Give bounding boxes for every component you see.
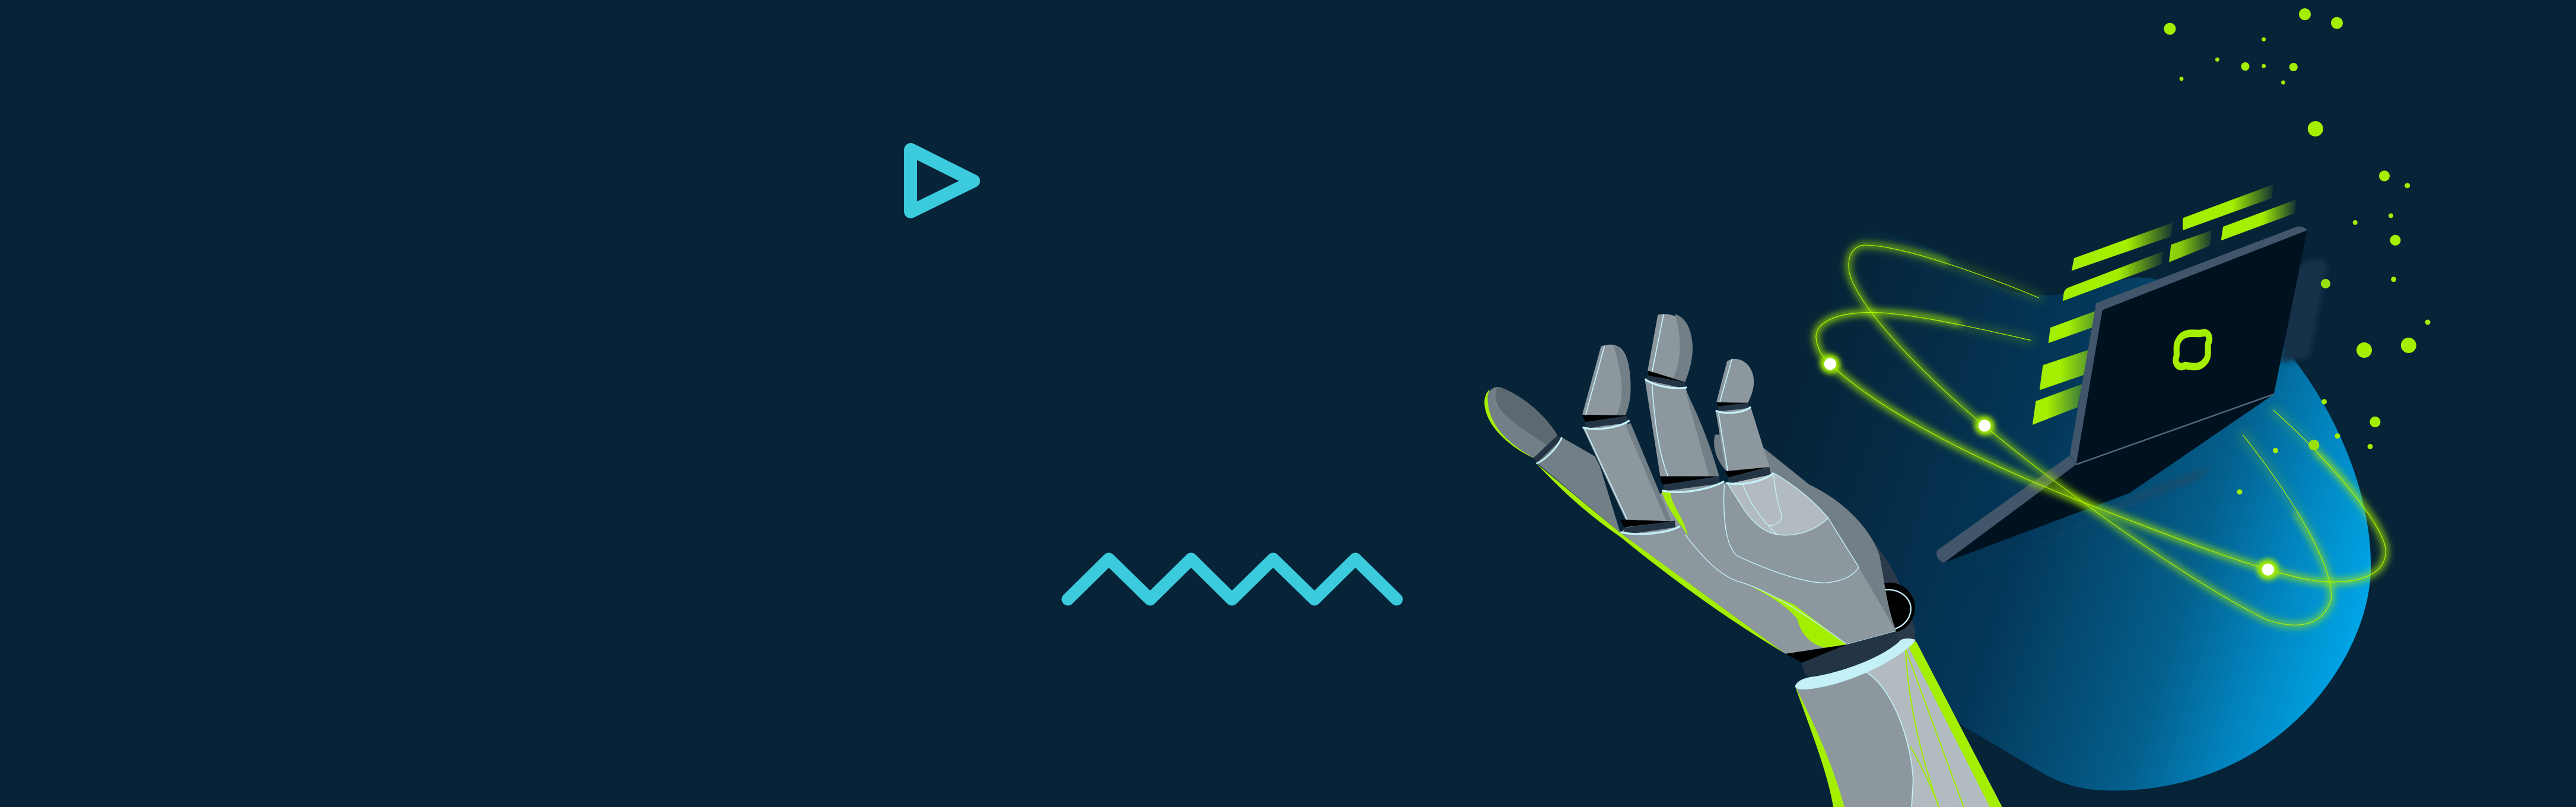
laptop — [1936, 227, 2307, 563]
palm line work — [1685, 473, 1896, 644]
icon: cyan play triangle — [911, 150, 974, 212]
wrist back plate — [1871, 538, 1915, 643]
blue blob — [1755, 227, 2371, 790]
palm green accent small — [1662, 492, 1688, 536]
glowing orbit lines — [1816, 245, 2386, 625]
forearm — [1795, 641, 2002, 807]
back of hand — [1714, 435, 1896, 631]
thumb — [1484, 387, 1620, 533]
icon: cyan zigzag line — [1068, 559, 1397, 599]
palm light pad — [1728, 473, 1828, 535]
palm green accent large — [1743, 583, 1847, 648]
glowing white nodes — [1820, 354, 2279, 580]
second finger — [1582, 345, 1680, 535]
robot hand and forearm — [1484, 314, 2002, 807]
green data bars behind laptop — [2033, 185, 2296, 425]
palm edge green sliver — [1536, 463, 1786, 654]
third finger — [1645, 314, 1724, 492]
soft laptop shadows — [1963, 259, 2327, 585]
scattered green particles — [2164, 8, 2430, 495]
ball joint — [1864, 583, 1915, 633]
fourth finger — [1716, 359, 1774, 484]
palm — [1620, 473, 1896, 654]
icon: laptop logo — [2176, 333, 2209, 367]
wrist cuff — [1786, 631, 1916, 690]
